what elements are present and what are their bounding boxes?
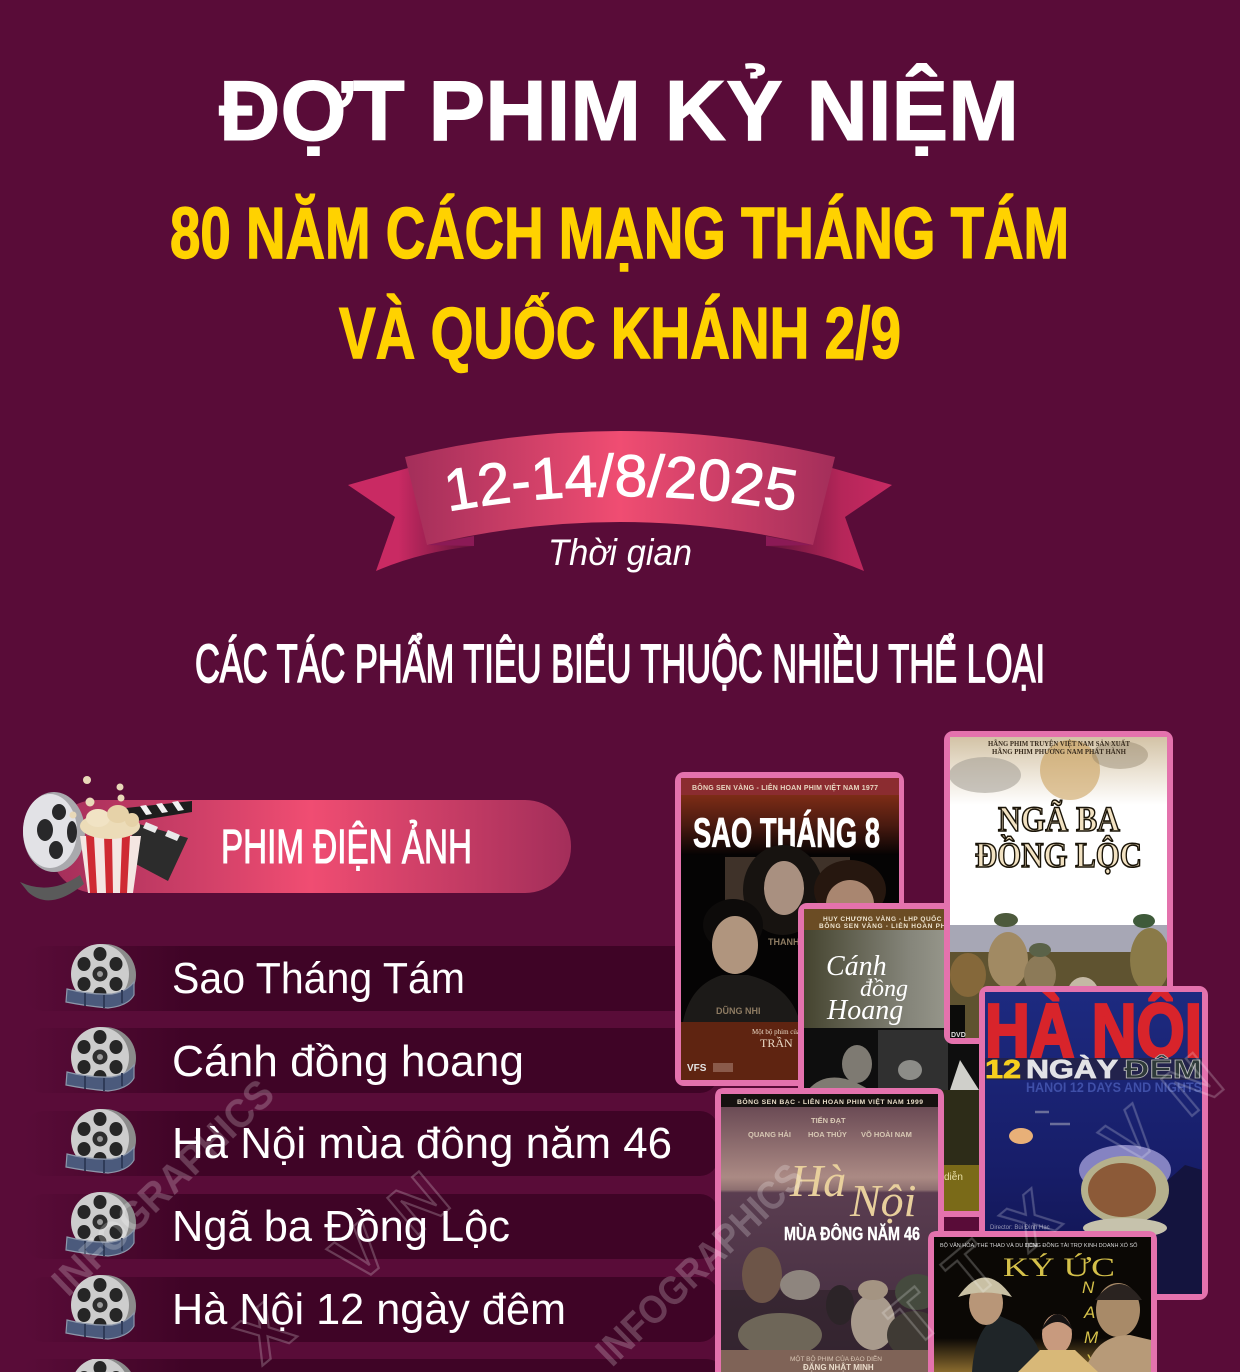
category pill: phim điện ảnh: [50, 800, 571, 893]
watermark: infographics and TTXVN: X VN: [222, 1157, 463, 1372]
list row: Ngã ba Đồng Lộc: Ngã ba Đồng Lộc: [172, 1202, 510, 1251]
poster: Ký ức Nam Xưa: [928, 1231, 1157, 1372]
poster: Hà Nội mùa đông năm 46: TIẾN ĐẠT: [811, 1115, 846, 1125]
poster: Ngã ba Đồng Lộc: HÃNG PHIM TRUYỆN VIỆT NAM SẢN XUẤT: [988, 738, 1130, 748]
poster: Cánh đồng hoang: Hoang: [826, 995, 903, 1026]
poster: Hà Nội mùa đông năm 46: Hà: [789, 1155, 846, 1206]
list row: Hà Nội 12 ngày đêm: [25, 1275, 718, 1342]
watermark: infographics and TTXVN: INFOGRAPHICS: [44, 1071, 283, 1304]
poster: Hà Nội 12 ngày đêm: NGÀY: [1026, 1054, 1118, 1084]
poster: Hà Nội 12 ngày đêm: [979, 986, 1208, 1300]
list row: partially visible sixth row: [76, 1359, 715, 1372]
poster: Sao Tháng 8: [675, 772, 904, 1086]
poster: Sao Tháng 8: Một bộ phim của: [752, 1028, 801, 1036]
poster: Sao Tháng 8: TRẦN: [760, 1035, 793, 1050]
poster: Cánh đồng hoang: [798, 903, 988, 1217]
list row: Cánh đồng hoang: [25, 1027, 718, 1093]
poster: Hà Nội mùa đông năm 46: BÔNG SEN BẠC - LIÊN HOAN PHIM VIỆT NAM 1999: [737, 1097, 923, 1106]
poster: Sao Tháng 8: DŨNG NHI: [716, 1006, 760, 1016]
poster: Sao Tháng 8: BÔNG SEN VÀNG - LIÊN HOAN PHIM VIỆT NAM 1977: [692, 783, 878, 792]
poster: Ký ức Nam Xưa: M: [1084, 1328, 1099, 1347]
list row: Hà Nội 12 ngày đêm: Hà Nội 12 ngày đêm: [172, 1285, 566, 1334]
poster: Ngã ba Đồng Lộc: [944, 731, 1173, 1044]
poster: Ngã ba Đồng Lộc: NGÃ BA: [998, 799, 1120, 839]
pill label: PHIM ĐIỆN ẢNH: [221, 819, 472, 874]
ribbon caption: Thời gian: [548, 532, 692, 573]
poster: Ký ức Nam Xưa: TỔNG ĐỒNG TÀI TRỢ KINH DOANH XỔ SỐ: [1025, 1242, 1138, 1249]
date ribbon: [348, 431, 892, 573]
poster: Ký ức Nam Xưa: A: [1083, 1303, 1095, 1322]
poster: Ngã ba Đồng Lộc: DVD: [951, 1032, 966, 1039]
poster: Sao Tháng 8: THANH: [768, 937, 800, 947]
title: ĐỢT PHIM KỶ NIỆM: [219, 63, 1019, 159]
list row: Sao Tháng Tám: [25, 944, 718, 1011]
poster: Sao Tháng 8: VFS: [687, 1063, 707, 1074]
list row: Hà Nội mùa đông năm 46: [25, 1109, 718, 1176]
poster: Hà Nội mùa đông năm 46: QUANG HẢI: [748, 1130, 791, 1139]
list row: Sao Tháng Tám: Sao Tháng Tám: [172, 954, 465, 1003]
poster: Hà Nội mùa đông năm 46: MỘT BỘ PHIM CỦA ĐẠO DIỄN: [790, 1354, 882, 1363]
poster: Cánh đồng hoang: BÔNG SEN VÀNG - LIÊN HOAN PHIM: [819, 921, 954, 930]
poster: Ký ức Nam Xưa: N: [1082, 1278, 1095, 1297]
list row: Ngã ba Đồng Lộc: [25, 1192, 718, 1259]
poster: Ký ức Nam Xưa: X: [1084, 1351, 1097, 1370]
list row: Hà Nội mùa đông năm 46: Hà Nội mùa đông năm 46: [172, 1119, 672, 1168]
poster: Ngã ba Đồng Lộc: HÃNG PHIM PHƯƠNG NAM PHÁT HÀNH: [992, 746, 1126, 756]
poster: Hà Nội 12 ngày đêm: ĐÊM: [1124, 1054, 1202, 1084]
poster: Ký ức Nam Xưa: KÝ ỨC: [1003, 1253, 1115, 1282]
poster: Hà Nội mùa đông năm 46: HOA THÚY: [808, 1130, 847, 1139]
subtitle: [170, 194, 1069, 374]
poster: Hà Nội 12 ngày đêm: 12: [985, 1054, 1021, 1084]
poster: Hà Nội mùa đông năm 46: ĐẶNG NHẬT MINH: [803, 1363, 874, 1372]
poster: Cánh đồng hoang: HUY CHƯƠNG VÀNG - LHP QUỐC TẾ: [823, 913, 954, 923]
watermark: infographics and TTXVN: INFOGRAPHICS: [588, 1155, 812, 1372]
poster: Hà Nội mùa đông năm 46: [715, 1088, 944, 1372]
subtitle: VÀ QUỐC KHÁNH 2/9: [339, 292, 901, 374]
list row: Cánh đồng hoang: Cánh đồng hoang: [172, 1037, 524, 1086]
poster: Ký ức Nam Xưa: BỘ VĂN HÓA, THỂ THAO VÀ DU LỊCH: [940, 1242, 1037, 1249]
poster: Hà Nội mùa đông năm 46: VÕ HOÀI NAM: [861, 1130, 912, 1139]
poster: Hà Nội 12 ngày đêm: Director: Bùi Đình Hạc: [990, 1225, 1050, 1231]
poster: Cánh đồng hoang: đồng: [860, 976, 908, 1002]
poster: Hà Nội mùa đông năm 46: Nội: [849, 1175, 916, 1226]
poster: Cánh đồng hoang: Cánh: [826, 951, 887, 982]
icon: film reel, popcorn and clapperboard: [20, 776, 192, 900]
poster: Cánh đồng hoang: diễn: [944, 1170, 963, 1183]
date: 12-14/8/2025: [448, 452, 796, 512]
watermark: infographics and TTXVN: [44, 1038, 1237, 1372]
poster: Ngã ba Đồng Lộc: ĐỒNG LỘC: [975, 834, 1142, 875]
watermark: infographics and TTXVN: TTX VN: [873, 1038, 1237, 1361]
